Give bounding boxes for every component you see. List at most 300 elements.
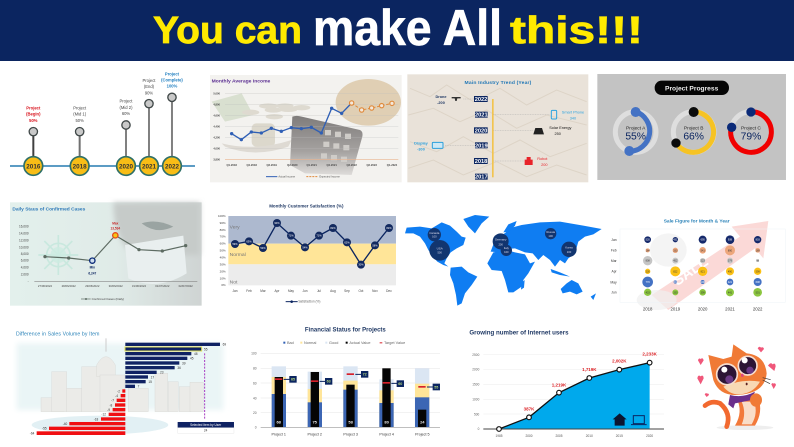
y axis labels xyxy=(472,353,480,431)
actual value bars xyxy=(275,368,426,427)
bubble values: 230 xyxy=(646,270,650,273)
milestone labels: 100% xyxy=(167,84,178,89)
line: satisfaction: 62% xyxy=(344,240,350,244)
y axis labels xyxy=(251,352,257,430)
stacked bars: bad xyxy=(272,390,429,427)
item: robot: Robot xyxy=(537,157,548,161)
panel: difference in sales volume: -9 xyxy=(107,408,110,412)
grid xyxy=(261,353,440,413)
x axis labels: Sep xyxy=(344,289,350,293)
chart title: Sale Figure for Month & Year xyxy=(664,218,730,224)
negative bars xyxy=(37,389,125,435)
vertical axis xyxy=(492,99,494,177)
background sale arrow xyxy=(637,221,768,310)
panel: monthly average income: 4,800 xyxy=(213,102,221,106)
year labels xyxy=(474,96,488,181)
donut: project C xyxy=(727,107,771,152)
year labels: 2021 xyxy=(725,307,735,312)
paper texture xyxy=(408,85,587,177)
bubble values: 431 xyxy=(673,239,678,242)
x axis labels: May xyxy=(288,289,294,293)
y axis labels: 20% xyxy=(220,269,226,273)
continents xyxy=(405,215,602,306)
row labels xyxy=(610,238,618,295)
x axis labels: Project 5 xyxy=(415,432,430,436)
bands xyxy=(228,216,396,285)
x axis labels: 31/06/2022 xyxy=(132,284,146,288)
milestone labels: 60% xyxy=(122,111,130,116)
positive bars xyxy=(125,343,220,388)
y axis labels: - xyxy=(28,279,29,283)
line: expected income xyxy=(349,101,394,112)
y axis labels: 0 xyxy=(255,426,257,430)
milestone labels: 90% xyxy=(145,90,153,95)
bubble values: 695 xyxy=(701,239,705,242)
year labels: 2021 xyxy=(142,163,157,170)
year labels xyxy=(26,163,180,170)
whiskers xyxy=(763,378,771,384)
year labels: 2022 xyxy=(165,163,180,170)
legend: Good xyxy=(329,341,338,345)
x axis labels xyxy=(38,284,193,288)
data labels: 1,219K xyxy=(552,382,567,387)
item: solar energy: Solar Energy xyxy=(549,126,571,130)
background photo: face and mask xyxy=(38,202,200,284)
title: You can xyxy=(153,10,302,52)
panel: monthly average income: 5,000 xyxy=(213,91,221,95)
chart title: Daily Staus of Confirmed Cases xyxy=(12,206,86,212)
y axis labels: 100% xyxy=(218,214,226,218)
bubble: Germany: 200 xyxy=(498,242,503,246)
line and markers xyxy=(497,360,652,431)
bubble values: 99 xyxy=(756,260,760,263)
line: satisfaction: 58% xyxy=(372,243,378,247)
bubble: Korea: Korea xyxy=(565,246,573,250)
donut: project A xyxy=(615,107,656,156)
chart title: Financial Status for Projects xyxy=(305,328,386,334)
x axis labels: 30/06/2022 xyxy=(109,284,123,288)
background city sketch xyxy=(17,338,223,434)
x axis labels: 2015 xyxy=(616,434,623,438)
bar value labels: 45 xyxy=(190,357,194,361)
legend xyxy=(283,341,405,345)
donut: project B: Project B xyxy=(684,125,703,131)
tail xyxy=(705,402,728,427)
item: drone xyxy=(435,95,461,105)
data labels: 2,233K xyxy=(642,352,658,357)
year labels: 2017 xyxy=(475,175,488,181)
panel: difference in sales volume: -8 xyxy=(110,403,113,407)
data labels: 1,719K xyxy=(582,367,597,372)
row labels: May xyxy=(610,280,617,284)
bubble: Italy: Italy xyxy=(504,246,510,250)
bubble: Italy xyxy=(501,245,512,256)
panel: project timeline xyxy=(10,72,195,175)
panel: monthly average income: 3,800 xyxy=(213,158,221,162)
year labels: 2018 xyxy=(643,307,653,312)
stacked bars: normal xyxy=(272,377,429,427)
chart title: Main Industry Trend (Year) xyxy=(465,80,532,86)
nose and mouth xyxy=(741,374,748,385)
panel: difference in sales volume: -7 xyxy=(111,399,114,403)
x axis labels: 2020 xyxy=(646,434,653,438)
target callouts: 65 xyxy=(291,378,295,382)
target callouts: 63 xyxy=(327,380,331,384)
bubble values: 333 xyxy=(673,249,678,252)
panel: difference in sales volume: -55 xyxy=(42,427,47,431)
item: smart phone: Smart Phone xyxy=(562,111,584,115)
x axis labels: 2010 xyxy=(586,434,593,438)
bubble: Russia: Russia xyxy=(546,230,555,234)
bar value labels xyxy=(138,343,226,389)
legend: Confirmed Cases (Daily) xyxy=(92,297,124,301)
bubble: USA: 500 xyxy=(437,251,442,255)
y axis labels: 60% xyxy=(220,242,226,246)
actual value labels: 80 xyxy=(384,420,390,425)
panel: monthly average income: Q2-2023 xyxy=(366,163,377,167)
x axis labels: Dec xyxy=(386,289,392,293)
bubble: Germany: Germany xyxy=(495,238,507,242)
bubble values: 91 xyxy=(674,281,677,284)
x axis labels: Aug xyxy=(330,289,336,293)
timeline stems xyxy=(33,97,172,160)
year labels xyxy=(643,307,763,312)
bar value labels: 15 xyxy=(148,380,152,384)
x axis labels: 27/06/2022 xyxy=(38,284,52,288)
bar value labels: 7 xyxy=(138,385,140,389)
y axis labels: 4,000 xyxy=(21,266,29,270)
panel: monthly average income: Q1-2018 xyxy=(226,163,237,167)
panel: monthly average income: Q4-2018 xyxy=(246,163,257,167)
selected value line xyxy=(203,353,206,420)
year labels: 2020 xyxy=(475,128,487,134)
bar value labels: 55 xyxy=(204,348,208,352)
chart title: Difference in Sales Volume by Item xyxy=(16,331,100,337)
y axis labels: 1500 xyxy=(472,383,480,387)
row labels: Jan xyxy=(611,238,617,242)
donut: project B: 66% xyxy=(683,131,704,142)
donut: project C: 79% xyxy=(741,131,761,142)
milestone labels: Project xyxy=(26,106,41,111)
line: satisfaction: 54% xyxy=(302,245,308,249)
line: satisfaction: 82% xyxy=(330,226,336,230)
panel: monthly average income: Q4-2021 xyxy=(326,163,337,167)
selected item box xyxy=(178,422,234,433)
y axis labels: 6,000 xyxy=(21,259,29,263)
y axis labels: 2,000 xyxy=(21,272,29,276)
item: robot: 200 xyxy=(541,163,548,167)
donut: project A: 55% xyxy=(625,131,646,142)
row labels: Apr xyxy=(611,270,618,274)
line: confirmed cases xyxy=(43,235,187,261)
heading pill xyxy=(655,81,729,95)
line: satisfaction: 71% xyxy=(316,234,322,238)
bubble values: 822 xyxy=(673,270,678,273)
bubbles: Mar xyxy=(643,256,759,265)
x axis labels xyxy=(232,289,392,293)
target callouts: 55 xyxy=(434,385,438,389)
bubble values: 599 xyxy=(756,270,760,273)
x axis labels: Project 1 xyxy=(271,432,286,436)
y axis labels: 60 xyxy=(253,381,257,385)
item: robot xyxy=(525,157,548,167)
bar value labels: 39 xyxy=(182,361,186,365)
min marker: 6,247 xyxy=(88,271,97,275)
data labels xyxy=(524,352,658,412)
item: smart phone xyxy=(551,110,584,121)
panel: difference in sales volume: -40 xyxy=(63,422,68,426)
y axis labels: 2500 xyxy=(472,353,480,357)
bubbles: Jan xyxy=(644,235,761,244)
max marker: Max xyxy=(112,221,119,225)
y axis labels xyxy=(19,225,29,283)
year labels: 2022 xyxy=(753,307,763,312)
title xyxy=(153,0,643,56)
y axis labels: 2000 xyxy=(472,368,480,372)
x axis labels: 1985 xyxy=(495,434,503,438)
x axis labels: Project 3 xyxy=(343,432,358,436)
actual value labels: 24 xyxy=(420,420,425,425)
y axis labels: 0 xyxy=(478,427,480,431)
data labels: 387K xyxy=(524,407,535,412)
x axis labels: 02/07/2022 xyxy=(179,284,193,288)
background photo: banknote, coins, calculator, egg xyxy=(212,79,401,175)
y axis labels xyxy=(218,214,226,287)
y axis labels: 14,000 xyxy=(19,232,29,236)
bubble: USA: USA xyxy=(437,247,443,251)
panel: monthly average income xyxy=(210,75,402,182)
panel: difference in sales volume xyxy=(16,331,234,436)
legend xyxy=(266,175,340,179)
item: smart phone: 340 xyxy=(570,117,576,121)
y axis labels: 70% xyxy=(220,235,226,239)
bubble values: 184 xyxy=(646,249,650,252)
x axis labels: 2005 xyxy=(555,434,563,438)
bubble values: 770 xyxy=(646,281,650,284)
bubble: Canada xyxy=(428,228,441,241)
panel: monthly average income: 4,000 xyxy=(213,147,221,151)
item: display xyxy=(414,141,443,151)
year badges xyxy=(24,157,181,175)
item: drone: Drone xyxy=(435,95,447,99)
y axis labels: 500 xyxy=(474,412,480,416)
eyes xyxy=(717,356,757,385)
grid xyxy=(483,355,664,414)
year labels: 2019 xyxy=(671,307,681,312)
y axis labels: 16,000 xyxy=(19,225,29,229)
bubble: Germany xyxy=(493,233,509,249)
selected item box: Selected Item by User xyxy=(190,423,221,427)
chart title: Growing number of Internet users xyxy=(469,330,569,337)
max marker xyxy=(110,221,120,238)
bubble values: 541 xyxy=(701,249,705,252)
year labels: 2018 xyxy=(73,163,87,170)
panel: monthly average income: 4,200 xyxy=(213,136,221,140)
item: solar energy: 250 xyxy=(554,132,561,136)
y axis labels: 12,000 xyxy=(19,238,29,242)
bubble: Canada: Canada xyxy=(429,231,440,235)
x axis labels: Jan xyxy=(232,289,238,293)
panel: world map xyxy=(405,215,602,306)
milestone labels: (Complete) xyxy=(161,78,183,83)
milestone labels: (End) xyxy=(144,84,155,89)
highlighted bar xyxy=(125,347,202,351)
item: solar energy xyxy=(533,126,571,136)
x axis labels: Oct xyxy=(359,289,364,293)
bar value labels: 17 xyxy=(151,375,154,379)
milestone labels: Project xyxy=(120,99,133,104)
min marker: Min xyxy=(90,266,95,270)
panel: difference in sales volume: -12 xyxy=(101,413,106,417)
panel: monthly average income: 4,400 xyxy=(213,125,221,129)
grid and axes xyxy=(225,93,398,149)
legend: Expected Income xyxy=(319,175,340,179)
stacked bars: good xyxy=(272,366,429,427)
milestone labels: Project xyxy=(165,72,180,77)
y axis labels: 40% xyxy=(220,256,226,260)
selected item box: 24 xyxy=(204,429,208,433)
milestone labels: (Mid 1) xyxy=(73,112,87,117)
line: satisfaction: 63% xyxy=(246,239,252,243)
x axis labels: Mar xyxy=(260,289,266,293)
area chart xyxy=(499,363,650,429)
icon: house xyxy=(613,413,627,426)
bubble values: 938 xyxy=(728,239,733,242)
panel: difference in sales volume: -4 xyxy=(115,394,118,398)
bubble values: 223 xyxy=(701,260,705,263)
chart title: Monthly Average Income xyxy=(212,78,271,84)
milestone labels: Project xyxy=(143,78,156,83)
panel: sale figure bubble chart xyxy=(610,218,785,312)
bubble values: 452 xyxy=(673,260,678,263)
x axis labels xyxy=(271,432,430,436)
bar value labels: 69 xyxy=(223,343,226,347)
bubble values: 399 xyxy=(701,291,705,294)
actual value labels xyxy=(276,420,425,425)
panel: monthly customer satisfaction xyxy=(218,203,396,304)
title: make All xyxy=(313,0,502,56)
hearts xyxy=(697,347,776,397)
panel: monthly average income: Q1-2021 xyxy=(306,163,317,167)
year labels: 2021 xyxy=(475,113,488,119)
target markers xyxy=(275,373,426,388)
bar value labels: 48 xyxy=(194,352,198,356)
bubble values: 189 xyxy=(756,249,760,252)
target callouts xyxy=(284,371,440,390)
bubble values: 100 xyxy=(701,281,705,284)
year labels: 2018 xyxy=(475,159,487,165)
y axis labels: 10% xyxy=(220,276,226,280)
shadow xyxy=(717,425,773,430)
y axis labels: 8,000 xyxy=(21,252,29,256)
year labels: 2020 xyxy=(119,163,134,170)
year labels: 2022 xyxy=(475,97,487,103)
panel: financial status for projects xyxy=(251,328,440,436)
line: actual income xyxy=(230,103,352,141)
panel: daily status of confirmed cases xyxy=(10,202,202,306)
y axis labels: 10,000 xyxy=(19,245,29,249)
milestone labels: 50% xyxy=(75,118,84,123)
legend xyxy=(286,300,320,304)
timeline markers xyxy=(29,93,176,136)
bubble: Canada: 100 xyxy=(432,235,437,239)
panel: monthly average income: Q3-2022 xyxy=(346,163,357,167)
bubble values: 330 xyxy=(673,291,678,294)
actual value labels: 68 xyxy=(276,420,282,425)
line: satisfaction: 82% xyxy=(386,226,392,230)
y axis labels: 1000 xyxy=(472,397,480,401)
panel: monthly average income: Q2-2020 xyxy=(287,163,298,167)
bubble values: 821 xyxy=(701,270,705,273)
panel: monthly average income: Q1-2024 xyxy=(387,163,398,167)
legend: Target Value xyxy=(384,341,405,345)
row labels: Feb xyxy=(611,249,617,253)
panel: main industry trend xyxy=(407,74,588,182)
header banner xyxy=(0,0,794,61)
line: satisfaction: 30% xyxy=(358,263,364,267)
line: satisfaction: 90% xyxy=(274,221,280,225)
panel: monthly average income: 4,600 xyxy=(213,113,221,117)
band labels xyxy=(230,225,246,285)
bubble values: 890 xyxy=(728,249,733,252)
scarf xyxy=(728,392,755,408)
icon: laptop xyxy=(631,416,647,425)
x axis labels: Apr xyxy=(275,289,279,293)
heading pill: Project Progress xyxy=(665,85,719,92)
bubble values: 433 xyxy=(646,291,650,294)
bubble values: 490 xyxy=(728,270,733,273)
bubbles: Apr xyxy=(645,266,761,276)
x axis labels xyxy=(495,434,653,438)
background sale arrow: SALE xyxy=(670,254,712,289)
band labels: Very xyxy=(230,225,240,231)
x axis labels: Jun xyxy=(302,289,308,293)
y axis labels: 100 xyxy=(251,352,257,356)
legend: Satisfaction (%) xyxy=(298,300,320,304)
panel: difference in sales volume: -64 xyxy=(30,432,35,436)
bubble values: 441 xyxy=(728,291,733,294)
bubble: Korea xyxy=(561,242,577,257)
y axis labels: 80 xyxy=(253,367,257,371)
panel: difference in sales volume: -18 xyxy=(94,417,99,421)
bubble: Russia: 100 xyxy=(548,234,553,238)
head and ears xyxy=(708,344,767,395)
legend: Actual Value xyxy=(349,341,371,345)
donut: project C: Project C xyxy=(741,125,761,131)
min marker xyxy=(88,258,97,275)
legend: Bad xyxy=(287,341,294,345)
x axis labels: Project 2 xyxy=(307,432,322,436)
bubble: USA xyxy=(429,240,450,261)
legend: Normal xyxy=(304,341,316,345)
milestone labels: (Mid 2) xyxy=(120,105,133,110)
paws xyxy=(750,393,762,407)
bubble values: 520 xyxy=(646,239,650,242)
donut: project A: Project A xyxy=(626,125,646,131)
bubble values: 501 xyxy=(756,291,760,294)
milestone labels: (Begin) xyxy=(26,112,41,117)
actual value labels: 58 xyxy=(348,420,354,425)
y axis labels: 0% xyxy=(221,283,226,287)
x axis labels: Jul xyxy=(317,289,321,293)
x axis labels: 28/06/2022 xyxy=(62,284,76,288)
title: this!!! xyxy=(510,10,643,52)
panel: project progress xyxy=(597,74,786,180)
year labels: 2020 xyxy=(698,307,708,312)
panel: growing number of internet users xyxy=(469,330,664,438)
year labels: 2019 xyxy=(475,143,488,149)
y axis labels: 50% xyxy=(220,249,226,253)
